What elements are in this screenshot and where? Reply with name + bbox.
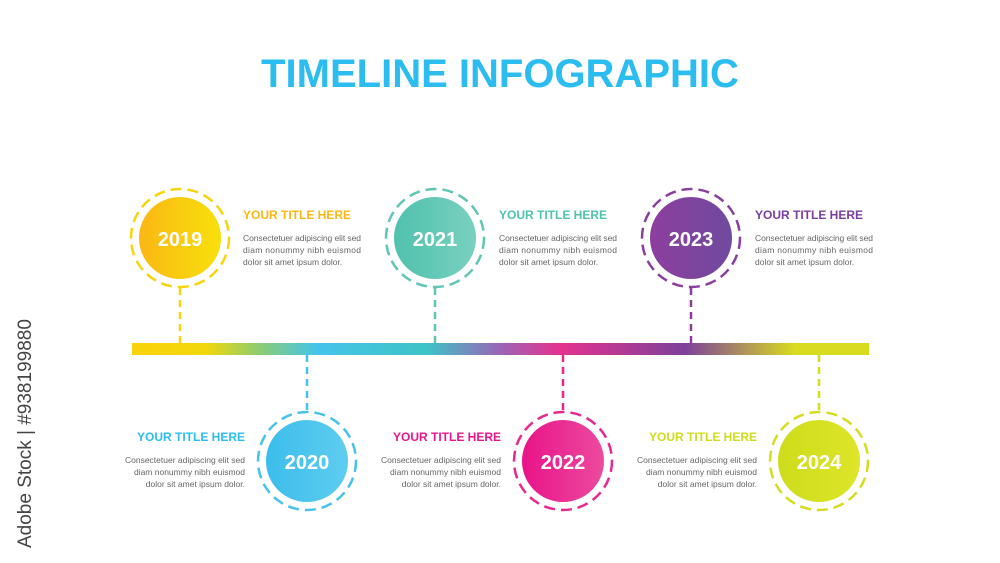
milestone: 2019 [131,189,361,343]
milestone: 2021: YOUR TITLE HERE [499,208,607,222]
milestone: 2021: diam nonummy nibh euismod [499,245,617,255]
milestone: 2023: 2023 [669,229,713,251]
milestone: 2022: diam nonummy nibh euismod [390,467,501,477]
milestone: 2020: 2020 [285,452,329,474]
milestone: 2019: YOUR TITLE HERE [243,208,351,222]
milestone: 2022: YOUR TITLE HERE [393,430,501,444]
milestone: 2019: Consectetuer adipiscing elit sed [243,233,361,243]
milestone: 2020: Consectetuer adipiscing elit sed [125,455,245,465]
milestone: 2023: Consectetuer adipiscing elit sed [755,233,873,243]
milestone: 2022: 2022 [541,452,585,474]
timeline bar [132,343,869,355]
milestone: 2019: diam nonummy nibh euismod [243,245,361,255]
milestone: 2024: YOUR TITLE HERE [649,430,757,444]
milestone: 2024: 2024 [797,452,842,474]
milestone: 2022 [381,355,612,510]
milestone: 2020: diam nonummy nibh euismod [134,467,245,477]
milestone: 2021: 2021 [413,229,457,251]
milestone: 2020: YOUR TITLE HERE [137,430,245,444]
milestone: 2024: Consectetuer adipiscing elit sed [637,455,757,465]
milestone: 2021: Consectetuer adipiscing elit sed [499,233,617,243]
title: TIMELINE INFOGRAPHIC [261,52,739,96]
milestone: 2022: Consectetuer adipiscing elit sed [381,455,501,465]
milestone: 2024: dolor sit amet ipsum dolor. [658,479,757,489]
milestone: 2023: dolor sit amet ipsum dolor. [755,257,854,267]
milestone: 2021 [386,189,617,343]
milestone: 2020: dolor sit amet ipsum dolor. [146,479,245,489]
milestone: 2019: 2019 [158,229,202,251]
milestone: 2023 [642,189,873,343]
milestone: 2023: YOUR TITLE HERE [755,208,863,222]
milestone: 2023: diam nonummy nibh euismod [755,245,873,255]
milestone: 2020 [125,355,356,510]
milestone: 2021: dolor sit amet ipsum dolor. [499,257,598,267]
milestone: 2024: diam nonummy nibh euismod [646,467,757,477]
milestone: 2019: dolor sit amet ipsum dolor. [243,257,342,267]
milestone: 2022: dolor sit amet ipsum dolor. [402,479,501,489]
milestone: 2024 [637,355,868,510]
watermark caption: Adobe Stock | #938199880 [15,319,36,548]
